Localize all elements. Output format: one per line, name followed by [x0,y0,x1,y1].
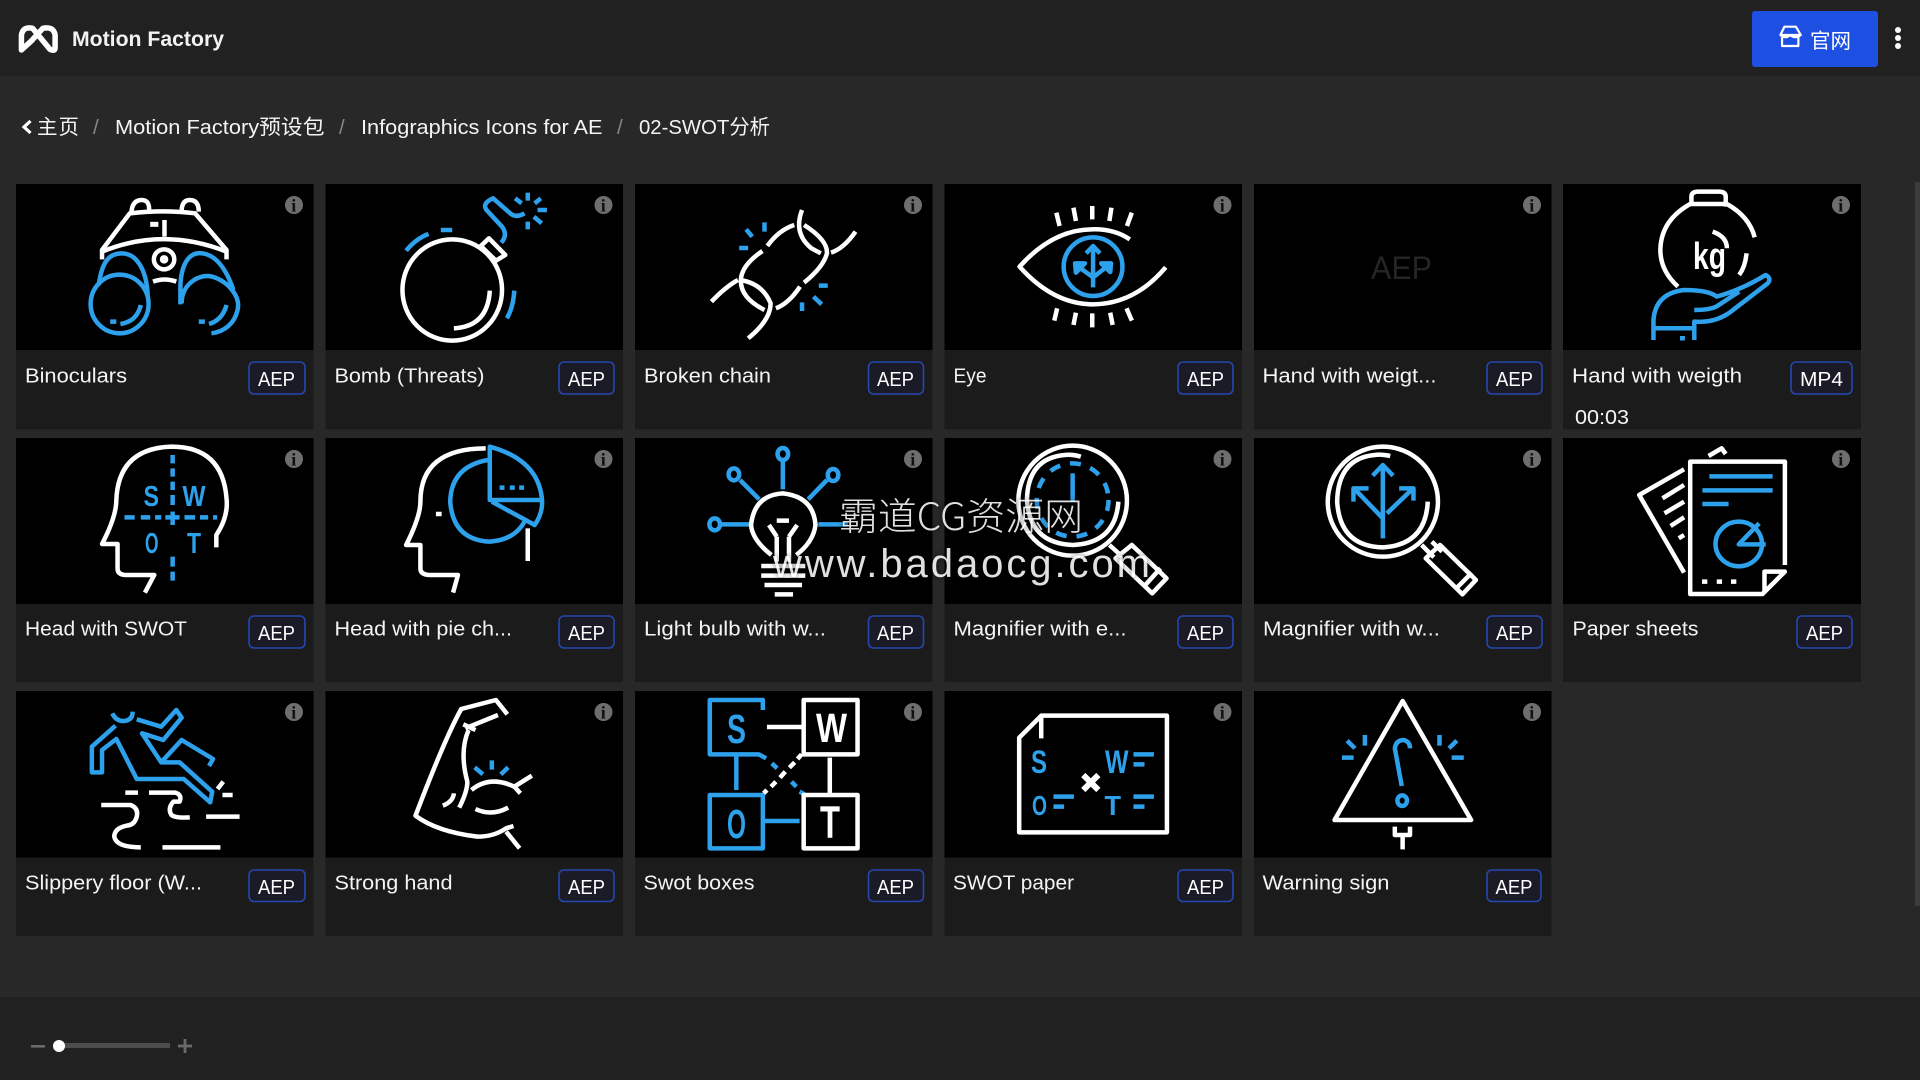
icon: SWOT boxes [710,700,858,848]
panel: Strong hand [326,691,623,936]
format badge: AEP [258,622,295,645]
panel: Warning sign [1254,691,1552,936]
icon: store [1780,27,1801,46]
title: Warning sign [1262,872,1390,894]
scrollbar [1915,182,1920,906]
info icon [904,196,922,216]
format badge [249,616,305,648]
footer bar with zoom slider [0,997,1920,1080]
format badge: MP4 [1800,368,1843,391]
icon: head with SWOT: T [187,528,201,560]
panel: Swot boxes [635,691,932,936]
info icon [1523,196,1541,216]
official site button [1752,11,1878,67]
panel: Broken chain [635,184,932,430]
icon: SWOT boxes: O [727,801,746,847]
format badge [1178,616,1233,648]
thumbnail [944,438,1242,604]
title: Magnifier with e... [954,618,1126,640]
format badge: AEP [877,876,914,899]
info icon [594,196,612,216]
zoom out icon [31,1045,45,1048]
icon: head with SWOT: S [144,481,159,513]
icon: SWOT boxes: W [816,705,847,751]
watermark: www.badaocg.com [772,542,1150,586]
title: Eye [954,364,986,388]
format badge: AEP [877,368,914,391]
duration: 00:03 [1575,406,1629,429]
format badge [249,362,305,394]
title: Swot boxes [644,872,754,894]
breadcrumb: 02-SWOT分析 [639,116,770,139]
format badge [559,362,614,394]
kebab menu [1895,27,1901,49]
watermark: 霸道CG资源网 [839,486,1083,541]
info icon [1214,702,1232,722]
format badge: AEP [258,876,295,899]
info icon [1832,196,1850,216]
breadcrumb: / [93,116,99,139]
title: Hand with weigt... [1262,364,1436,388]
panel: Magnifier with w... [1254,438,1552,682]
breadcrumb: / [617,116,623,139]
icon: binoculars [91,200,238,333]
icon: Motion Factory logo [21,28,55,50]
format badge: AEP [1806,622,1843,645]
format badge: AEP [1187,622,1224,645]
panel: Bomb (Threats) [326,184,623,430]
format badge: AEP [568,622,605,645]
format badge [559,870,614,902]
thumbnail [326,438,623,604]
format badge [1487,362,1542,394]
format badge: AEP [1496,368,1533,391]
format badge: AEP [258,368,295,391]
title: Broken chain [644,364,771,388]
panel: Magnifier with e... [944,438,1242,682]
format badge [249,870,305,902]
info icon [904,702,922,722]
icon: broken chain [711,210,856,338]
title: Head with SWOT [25,618,187,640]
top navigation bar [0,0,1920,76]
thumbnail [16,691,314,858]
title: Slippery floor (W... [25,872,202,894]
format badge: AEP [877,622,914,645]
title: SWOT paper [953,872,1074,894]
icon: SWOT paper: S [1031,744,1047,780]
icon: SWOT paper: W [1105,744,1129,780]
breadcrumb: Infographics Icons for AE [361,116,602,139]
title: Light bulb with w... [644,618,826,640]
icon: SWOT boxes: S [727,706,746,752]
icon: head with pie chart [406,447,542,593]
breadcrumb: 主页 [37,116,79,139]
title: Paper sheets [1572,618,1698,640]
watermark [772,486,1150,586]
format badge: AEP [568,368,605,391]
title: Bomb (Threats) [334,364,484,388]
icon: paper sheets [1639,448,1785,594]
panel: Binoculars [16,184,314,430]
slider track [59,1043,170,1048]
info icon [594,450,612,470]
format badge: AEP [1187,876,1224,899]
format badge [559,616,614,648]
thumbnail [326,184,623,350]
format badge [1791,362,1852,394]
thumbnail [1254,184,1552,350]
thumbnail [944,184,1242,350]
thumbnail [16,184,314,350]
icon: warning sign [1335,701,1471,849]
format badge: AEP [568,876,605,899]
info icon [1523,702,1541,722]
format badge [1487,870,1541,902]
panel: Hand with weigt... (AEP) [1254,184,1552,430]
info icon [1214,196,1232,216]
thumbnail [944,691,1242,858]
format badge [868,616,924,648]
title: Strong hand [334,872,452,894]
info icon [904,450,922,470]
icon: SWOT paper: O [1032,790,1047,821]
icon: SWOT paper: T [1104,790,1121,821]
icon: head with SWOT: O [145,528,158,560]
info icon [285,196,303,216]
brand name: Motion Factory [72,28,224,51]
panel: Hand with weigth (MP4) [1563,184,1861,430]
breadcrumb: Motion Factory预设包 [115,116,324,139]
thumbnail [635,691,932,858]
title: Binoculars [25,364,127,388]
icon: head with SWOT: W [182,481,206,513]
format badge [1797,616,1852,648]
title: Hand with weigth [1572,364,1742,388]
format badge [868,870,924,902]
format badge: AEP [1496,622,1533,645]
format badge [868,362,924,394]
thumbnail [1254,438,1552,604]
icon: bomb [402,193,547,341]
thumbnail [1563,438,1861,604]
info icon [1832,450,1850,470]
title: Magnifier with w... [1263,618,1440,640]
title: Head with pie ch... [334,618,512,640]
info icon [1214,450,1232,470]
thumbnail [16,438,314,604]
breadcrumb: / [339,116,345,139]
icon: hand with weight [1653,192,1769,340]
panel: Paper sheets [1563,438,1861,682]
format badge [1178,870,1233,902]
icon: slippery floor [92,710,240,847]
thumbnail [635,438,932,604]
panel: Head with pie chart [326,438,623,682]
panel: Head with SWOT [16,438,314,682]
format badge: AEP [1496,876,1532,899]
icon: magnifier with arrows [1328,447,1476,594]
thumbnail [1254,691,1552,858]
icon: hand with weight: kg [1693,236,1726,278]
info icon [1523,450,1541,470]
breadcrumb [24,116,770,139]
icon: eye [1020,206,1166,327]
panel: Light bulb [635,438,932,682]
icon: SWOT boxes: T [820,797,840,848]
icon: strong arm [416,700,532,848]
info icon [285,702,303,722]
zoom in icon [178,1039,192,1053]
icon: SWOT paper [1019,716,1167,832]
icon: light bulb [709,448,848,594]
icon: magnifier with clock [1018,446,1167,593]
format badge [1487,616,1542,648]
thumbnail [326,691,623,858]
button label: 官网 [1810,30,1851,53]
placeholder label: AEP [1371,250,1432,286]
panel: Eye [944,184,1242,430]
thumbnail [1563,184,1861,350]
format badge [1178,362,1233,394]
thumbnail [635,184,932,350]
panel: SWOT paper [944,691,1242,936]
format badge: AEP [1187,368,1224,391]
slider thumb [53,1040,65,1052]
icon: head with SWOT [102,447,227,593]
info icon [285,450,303,470]
panel: Slippery floor [16,691,314,936]
info icon [594,702,612,722]
